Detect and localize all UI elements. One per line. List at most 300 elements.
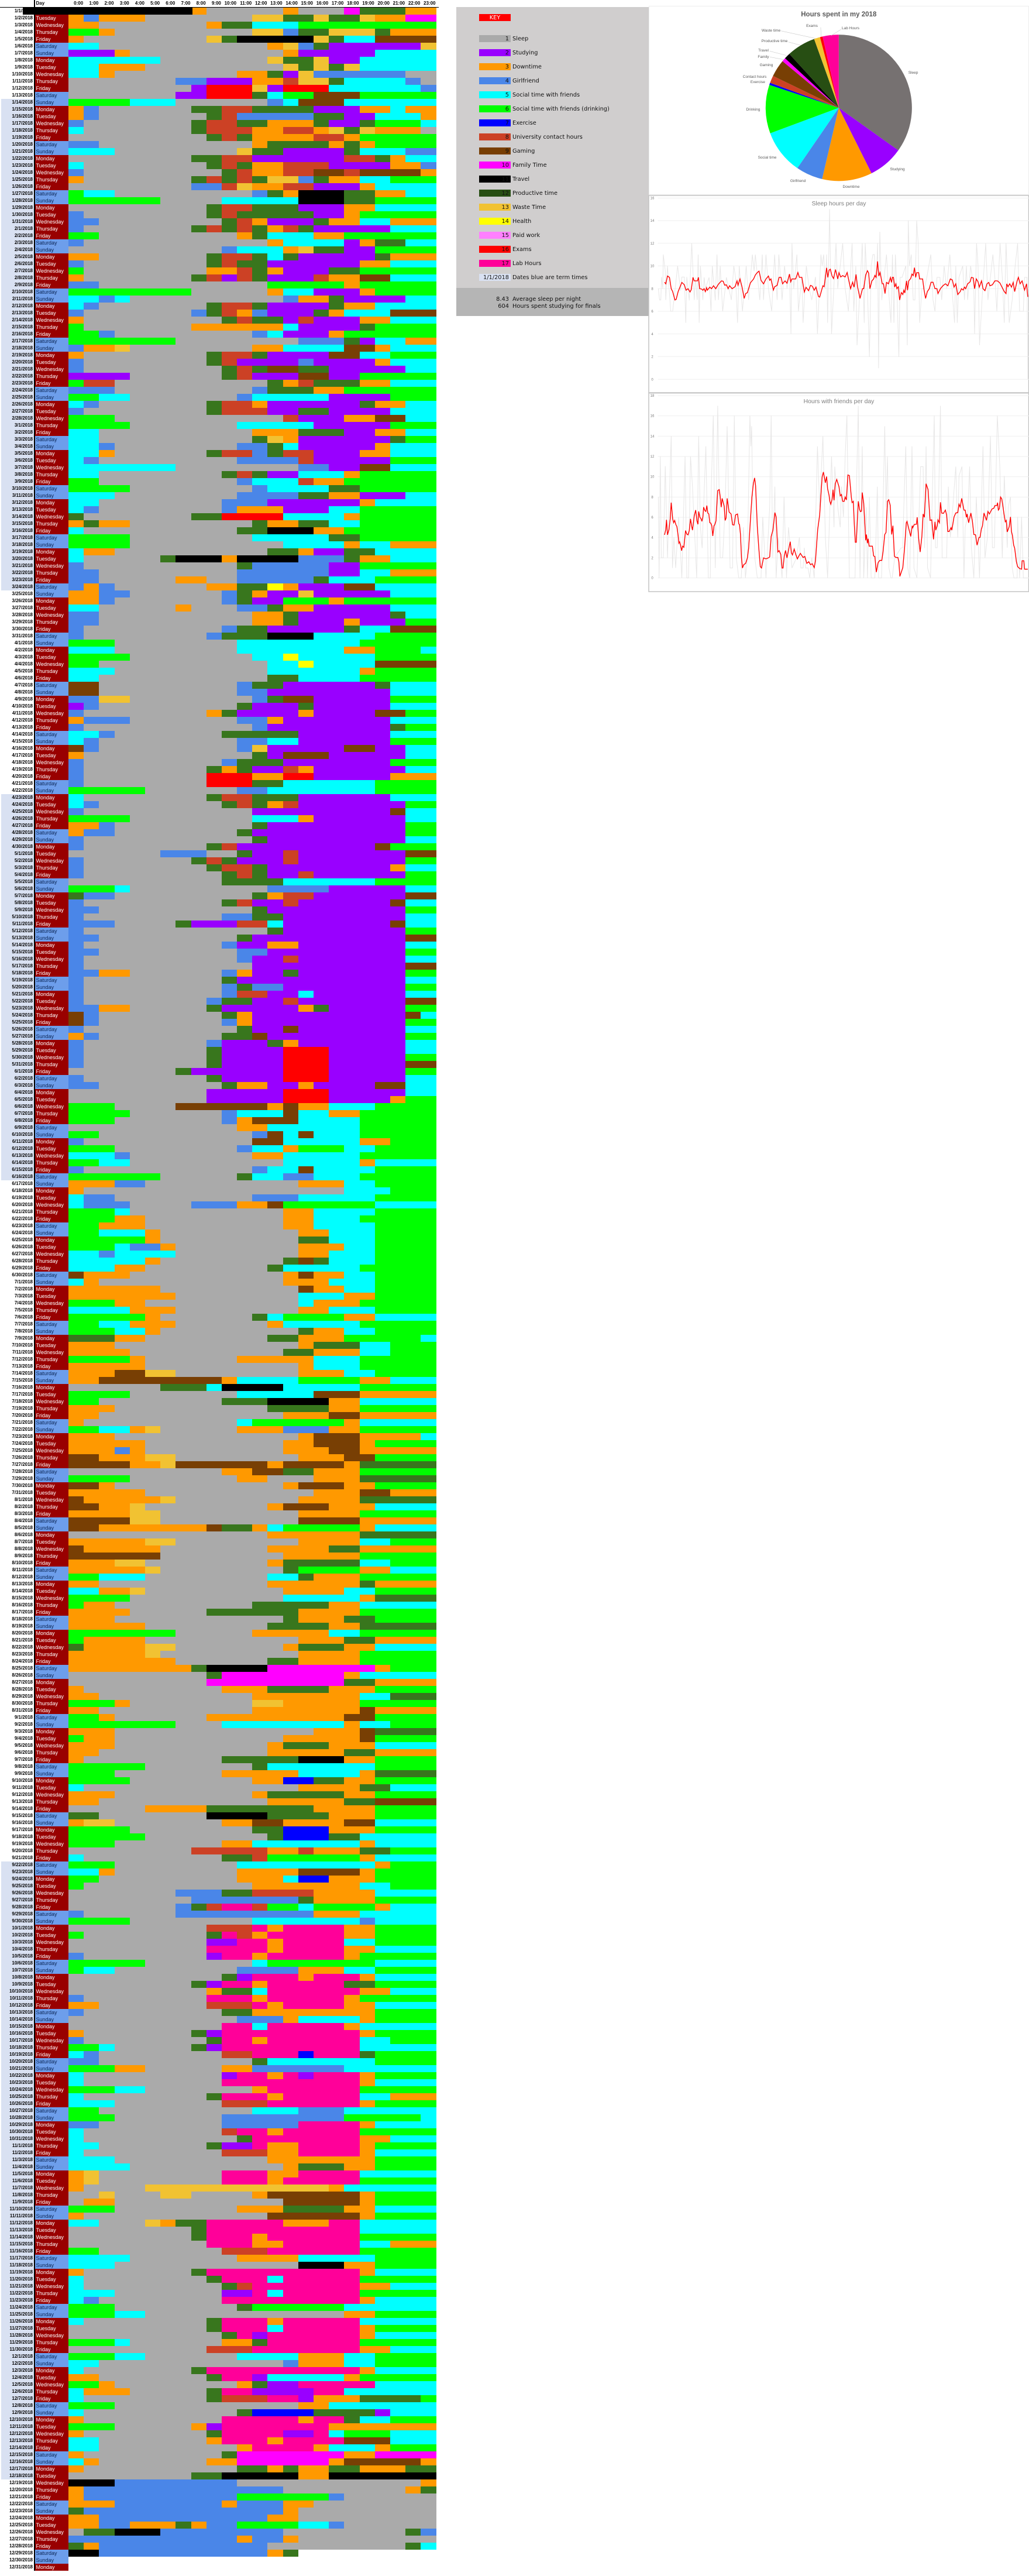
heatmap: hour-by-hour activity for every day of 2018: 9/2/2018 bbox=[15, 1722, 33, 1727]
heatmap: hour-by-hour activity for every day of 2018: Thursday bbox=[36, 1258, 58, 1264]
heatmap: hour-by-hour activity for every day of 2018: 4/18/2018 bbox=[12, 760, 33, 765]
heatmap: hour-by-hour activity for every day of 2018: Friday bbox=[36, 2494, 51, 2500]
heatmap: hour-by-hour activity for every day of 2018: Sunday bbox=[36, 2066, 54, 2072]
heatmap: hour-by-hour activity for every day of 2018: Tuesday bbox=[36, 802, 56, 808]
heatmap: hour-by-hour activity for every day of 2018: Monday bbox=[36, 1581, 55, 1587]
heatmap: hour-by-hour activity for every day of 2018: 7/23/2018 bbox=[12, 1434, 33, 1439]
heatmap: hour-by-hour activity for every day of 2018: 3/30/2018 bbox=[12, 626, 33, 631]
heatmap: hour-by-hour activity for every day of 2018: 4/9/2018 bbox=[15, 696, 33, 702]
heatmap: hour-by-hour activity for every day of 2018: 5/18/2018 bbox=[12, 970, 33, 976]
heatmap: hour-by-hour activity for every day of 2018: Sunday bbox=[36, 1918, 54, 1924]
heatmap: hour-by-hour activity for every day of 2018: Tuesday bbox=[36, 1293, 56, 1299]
heatmap: hour-by-hour activity for every day of 2018: Wednesday bbox=[36, 1055, 64, 1060]
heatmap: hour-by-hour activity for every day of 2018: Monday bbox=[36, 352, 55, 358]
heatmap: hour-by-hour activity for every day of 2018: 12/3/2018 bbox=[12, 2368, 33, 2373]
heatmap: hour-by-hour activity for every day of 2018: 4/5/2018 bbox=[15, 668, 33, 674]
heatmap: hour-by-hour activity for every day of 2018: 7/9/2018 bbox=[15, 1335, 33, 1341]
heatmap: hour-by-hour activity for every day of 2018: Saturday bbox=[36, 1616, 57, 1622]
heatmap: hour-by-hour activity for every day of 2018: 12/17/2018 bbox=[9, 2466, 33, 2471]
heatmap: hour-by-hour activity for every day of 2018: 2/1/2018 bbox=[15, 226, 33, 231]
heatmap: hour-by-hour activity for every day of 2018: Thursday bbox=[36, 2438, 58, 2444]
heatmap: hour-by-hour activity for every day of 2018: 4/30/2018 bbox=[12, 844, 33, 849]
key: studying: Studying bbox=[512, 50, 538, 56]
heatmap: hour-by-hour activity for every day of 2018: 12/30/2018 bbox=[9, 2557, 33, 2563]
heatmap: hour-by-hour activity for every day of 2018: 10/28/2018 bbox=[9, 2115, 33, 2120]
heatmap: hour-by-hour activity for every day of 2018: Tuesday bbox=[36, 2178, 56, 2184]
heatmap: hour-by-hour activity for every day of 2018: 1/26/2018 bbox=[12, 184, 33, 189]
heatmap: hour-by-hour activity for every day of 2018: Saturday bbox=[36, 1420, 57, 1426]
heatmap: hour-by-hour activity for every day of 2018: Wednesday bbox=[36, 2185, 64, 2191]
heatmap: hour-by-hour activity for every day of 2018: Tuesday bbox=[36, 1441, 56, 1447]
heatmap: hour-by-hour activity for every day of 2018: Wednesday bbox=[36, 317, 64, 323]
heatmap: hour-by-hour activity for every day of 2018: Wednesday bbox=[36, 907, 64, 913]
key: health: 14 bbox=[502, 218, 509, 225]
heatmap: hour-by-hour activity for every day of 2018: Sunday bbox=[36, 296, 54, 302]
heatmap header row: Day bbox=[36, 1, 44, 6]
heatmap: hour-by-hour activity for every day of 2018: 1/23/2018 bbox=[12, 163, 33, 168]
key: health: Health bbox=[512, 218, 531, 225]
heatmap: hour-by-hour activity for every day of 2018: 1/30/2018 bbox=[12, 212, 33, 217]
heatmap: hour-by-hour activity for every day of 2018: Friday bbox=[36, 1118, 51, 1124]
key: girlfriend: 4 bbox=[505, 78, 509, 84]
heatmap: hour-by-hour activity for every day of 2018: Sunday bbox=[36, 1033, 54, 1039]
heatmap: hour-by-hour activity for every day of 2018: 8/29/2018 bbox=[12, 1694, 33, 1699]
heatmap: hour-by-hour activity for every day of 2018: 10/23/2018 bbox=[9, 2080, 33, 2085]
pie chart: hours spent in 2018: Exams bbox=[806, 24, 818, 28]
heatmap: hour-by-hour activity for every day of 2018: 9/28/2018 bbox=[12, 1904, 33, 1909]
heatmap: hour-by-hour activity for every day of 2018: Saturday bbox=[36, 1665, 57, 1671]
heatmap: hour-by-hour activity for every day of 2018: Monday bbox=[36, 451, 55, 456]
heatmap: hour-by-hour activity for every day of 2018: Thursday bbox=[36, 2045, 58, 2051]
pie chart: hours spent in 2018: Hours spent in my 2018 bbox=[801, 11, 877, 18]
heatmap: hour-by-hour activity for every day of 2018: 1/28/2018 bbox=[12, 198, 33, 203]
heatmap: hour-by-hour activity for every day of 2018: Wednesday bbox=[36, 366, 64, 372]
heatmap header row: 11:00 bbox=[240, 1, 252, 6]
heatmap: hour-by-hour activity for every day of 2018: 10/15/2018 bbox=[9, 2024, 33, 2029]
key: social time drinking: Social time with friends (drinking) bbox=[512, 106, 610, 112]
heatmap: hour-by-hour activity for every day of 2018: 6/2/2018 bbox=[15, 1076, 33, 1081]
heatmap: hour-by-hour activity for every day of 2018: 4/23/2018 bbox=[12, 795, 33, 800]
heatmap: hour-by-hour activity for every day of 2018: Monday bbox=[36, 746, 55, 751]
heatmap: hour-by-hour activity for every day of 2018: 9/7/2018 bbox=[15, 1757, 33, 1762]
heatmap: hour-by-hour activity for every day of 2018: Tuesday bbox=[36, 2227, 56, 2233]
key: paid work: Paid work bbox=[512, 232, 540, 239]
heatmap: hour-by-hour activity for every day of 2018: Tuesday bbox=[36, 2326, 56, 2331]
heatmap: hour-by-hour activity for every day of 2018: Thursday bbox=[36, 1995, 58, 2001]
heatmap: hour-by-hour activity for every day of 2018: 12/2/2018 bbox=[12, 2361, 33, 2366]
key: downtime: 3 bbox=[505, 64, 509, 70]
line chart: hours with friends per day bbox=[648, 393, 1029, 592]
heatmap: hour-by-hour activity for every day of 2018: Saturday bbox=[36, 43, 57, 49]
heatmap: hour-by-hour activity for every day of 2018: Tuesday bbox=[36, 1981, 56, 1987]
heatmap: hour-by-hour activity for every day of 2018: Saturday bbox=[36, 191, 57, 197]
heatmap: hour-by-hour activity for every day of 2018: 7/28/2018 bbox=[12, 1469, 33, 1474]
heatmap: hour-by-hour activity for every day of 2018: Tuesday bbox=[36, 1588, 56, 1594]
term-time date shading autumn term bbox=[1, 1861, 34, 2479]
key: sleep bbox=[479, 35, 528, 42]
heatmap: hour-by-hour activity for every day of 2018: Monday bbox=[36, 1876, 55, 1882]
heatmap: hour-by-hour activity for every day of 2018: 11/29/2018 bbox=[9, 2340, 33, 2345]
heatmap: hour-by-hour activity for every day of 2018: 1/24/2018 bbox=[12, 170, 33, 175]
heatmap header row: 18:00 bbox=[347, 1, 359, 6]
heatmap: hour-by-hour activity for every day of 2018: Sunday bbox=[36, 50, 54, 56]
heatmap: hour-by-hour activity for every day of 2018: Friday bbox=[36, 1904, 51, 1910]
heatmap: hour-by-hour activity for every day of 2018: Sunday bbox=[36, 1869, 54, 1875]
heatmap: hour-by-hour activity for every day of 2018: Wednesday bbox=[36, 710, 64, 716]
heatmap: hour-by-hour activity for every day of 2018: 3/14/2018 bbox=[12, 514, 33, 519]
heatmap: hour-by-hour activity for every day of 2018: 3/10/2018 bbox=[12, 486, 33, 491]
heatmap: hour-by-hour activity for every day of 2018: 9/15/2018 bbox=[12, 1813, 33, 1818]
line chart: sleep hours per day: 0 bbox=[651, 378, 653, 382]
heatmap: hour-by-hour activity for every day of 2018: 8/21/2018 bbox=[12, 1637, 33, 1643]
heatmap: hour-by-hour activity for every day of 2018: 1/1/2018 bbox=[15, 8, 33, 13]
heatmap: hour-by-hour activity for every day of 2018: Friday bbox=[36, 2003, 51, 2008]
heatmap: hour-by-hour activity for every day of 2018: Friday bbox=[36, 528, 51, 534]
heatmap: hour-by-hour activity for every day of 2018: 7/26/2018 bbox=[12, 1455, 33, 1460]
heatmap: hour-by-hour activity for every day of 2018: Sunday bbox=[36, 2115, 54, 2121]
heatmap: hour-by-hour activity for every day of 2018: 1/19/2018 bbox=[12, 135, 33, 140]
heatmap: hour-by-hour activity for every day of 2018: Monday bbox=[36, 205, 55, 211]
heatmap header row: 2:00 bbox=[105, 1, 114, 6]
heatmap: hour-by-hour activity for every day of 2018: Friday bbox=[36, 1314, 51, 1320]
heatmap: hour-by-hour activity for every day of 2018: 3/7/2018 bbox=[15, 465, 33, 470]
heatmap: hour-by-hour activity for every day of 2018: Wednesday bbox=[36, 2382, 64, 2388]
heatmap: hour-by-hour activity for every day of 2018: Tuesday bbox=[36, 1490, 56, 1496]
heatmap: hour-by-hour activity for every day of 2018: Sunday bbox=[36, 345, 54, 351]
heatmap: hour-by-hour activity for every day of 2018: 4/21/2018 bbox=[12, 781, 33, 786]
heatmap: hour-by-hour activity for every day of 2018: 2/11/2018 bbox=[12, 296, 33, 301]
heatmap: hour-by-hour activity for every day of 2018: 5/27/2018 bbox=[12, 1033, 33, 1039]
heatmap: hour-by-hour activity for every day of 2018: Saturday bbox=[36, 830, 57, 836]
heatmap: hour-by-hour activity for every day of 2018: 6/10/2018 bbox=[12, 1132, 33, 1137]
heatmap: hour-by-hour activity for every day of 2018: Wednesday bbox=[36, 2480, 64, 2486]
heatmap: hour-by-hour activity for every day of 2018: Wednesday bbox=[36, 1988, 64, 1994]
heatmap: hour-by-hour activity for every day of 2018: 10/4/2018 bbox=[12, 1946, 33, 1952]
heatmap: hour-by-hour activity for every day of 2018: Thursday bbox=[36, 1553, 58, 1559]
heatmap: hour-by-hour activity for every day of 2018: 1/14/2018 bbox=[12, 99, 33, 105]
key: exercise: 7 bbox=[505, 120, 509, 126]
heatmap: hour-by-hour activity for every day of 2018: 7/12/2018 bbox=[12, 1356, 33, 1362]
pie chart: hours spent in 2018: Productive time bbox=[762, 39, 788, 43]
heatmap: hour-by-hour activity for every day of 2018: 12/23/2018 bbox=[9, 2508, 33, 2513]
heatmap: hour-by-hour activity for every day of 2018: 4/24/2018 bbox=[12, 802, 33, 807]
heatmap: hour-by-hour activity for every day of 2018: 2/8/2018 bbox=[15, 275, 33, 280]
heatmap: hour-by-hour activity for every day of 2018: 7/1/2018 bbox=[15, 1279, 33, 1284]
heatmap header row: 17:00 bbox=[332, 1, 343, 6]
heatmap: hour-by-hour activity for every day of 2018: Sunday bbox=[36, 2311, 54, 2317]
heatmap: hour-by-hour activity for every day of 2018: Tuesday bbox=[36, 998, 56, 1004]
heatmap: hour-by-hour activity for every day of 2018: 7/6/2018 bbox=[15, 1314, 33, 1320]
pie chart: hours spent in 2018: Studying bbox=[890, 167, 905, 171]
heatmap: hour-by-hour activity for every day of 2018: 1/31/2018 bbox=[12, 219, 33, 224]
heatmap: hour-by-hour activity for every day of 2018: 10/16/2018 bbox=[9, 2031, 33, 2036]
heatmap: hour-by-hour activity for every day of 2018: Saturday bbox=[36, 781, 57, 786]
key: paid work: 15 bbox=[502, 232, 509, 239]
heatmap: hour-by-hour activity for every day of 2018: 7/5/2018 bbox=[15, 1307, 33, 1313]
heatmap: hour-by-hour activity for every day of 2018: 3/23/2018 bbox=[12, 577, 33, 582]
heatmap: hour-by-hour activity for every day of 2018: Sunday bbox=[36, 837, 54, 843]
heatmap: hour-by-hour activity for every day of 2018: Wednesday bbox=[36, 71, 64, 77]
heatmap: hour-by-hour activity for every day of 2018: Wednesday bbox=[36, 2087, 64, 2093]
heatmap: hour-by-hour activity for every day of 2018: 8/25/2018 bbox=[12, 1665, 33, 1671]
heatmap: hour-by-hour activity for every day of 2018: 8/4/2018 bbox=[15, 1518, 33, 1523]
heatmap: hour-by-hour activity for every day of 2018: 7/27/2018 bbox=[12, 1462, 33, 1467]
heatmap: hour-by-hour activity for every day of 2018: Saturday bbox=[36, 1223, 57, 1229]
heatmap: hour-by-hour activity for every day of 2018: 11/21/2018 bbox=[9, 2283, 33, 2289]
line chart: hours with friends per day: 10 bbox=[651, 476, 655, 479]
heatmap: hour-by-hour activity for every day of 2018: 6/27/2018 bbox=[12, 1251, 33, 1256]
heatmap: hour-by-hour activity for every day of 2018: 9/24/2018 bbox=[12, 1876, 33, 1881]
heatmap: hour-by-hour activity for every day of 2018: 5/26/2018 bbox=[12, 1026, 33, 1032]
heatmap: hour-by-hour activity for every day of 2018: 12/1/2018 bbox=[12, 2354, 33, 2359]
heatmap: hour-by-hour activity for every day of 2018: 3/1/2018 bbox=[15, 423, 33, 428]
term-time date shading bbox=[1, 99, 34, 590]
heatmap: hour-by-hour activity for every day of 2018: 6/19/2018 bbox=[12, 1195, 33, 1200]
key: paid work bbox=[479, 232, 540, 239]
heatmap: hour-by-hour activity for every day of 2018: 1/20/2018 bbox=[12, 142, 33, 147]
line chart: sleep hours per day: 12 bbox=[651, 242, 655, 246]
heatmap: hour-by-hour activity for every day of 2018: Thursday bbox=[36, 668, 58, 674]
heatmap: hour-by-hour activity for every day of 2018: Thursday bbox=[36, 2536, 58, 2542]
heatmap: hour-by-hour activity for every day of 2018: 9/27/2018 bbox=[12, 1897, 33, 1902]
heatmap: hour-by-hour activity for every day of 2018: Sunday bbox=[36, 2017, 54, 2022]
heatmap: hour-by-hour activity for every day of 2018: 6/25/2018 bbox=[12, 1237, 33, 1242]
heatmap: hour-by-hour activity for every day of 2018: Thursday bbox=[36, 1062, 58, 1067]
line chart: hours with friends per day: 8 bbox=[651, 496, 653, 499]
heatmap: hour-by-hour activity for every day of 2018: Friday bbox=[36, 2297, 51, 2303]
heatmap: hour-by-hour activity for every day of 2018: 1/17/2018 bbox=[12, 121, 33, 126]
heatmap: hour-by-hour activity for every day of 2018: 6/17/2018 bbox=[12, 1181, 33, 1186]
heatmap: hour-by-hour activity for every day of 2018: 11/9/2018 bbox=[12, 2199, 33, 2204]
heatmap: hour-by-hour activity for every day of 2018: Monday bbox=[36, 2220, 55, 2226]
heatmap: hour-by-hour activity for every day of 2018: Monday bbox=[36, 647, 55, 653]
heatmap: hour-by-hour activity for every day of 2018: Wednesday bbox=[36, 1743, 64, 1749]
heatmap: hour-by-hour activity for every day of 2018: Monday bbox=[36, 1532, 55, 1538]
pie chart: hours spent in 2018: Girlfriend bbox=[790, 179, 806, 183]
heatmap: hour-by-hour activity for every day of 2018: 10/3/2018 bbox=[12, 1939, 33, 1945]
heatmap: hour-by-hour activity for every day of 2018: Saturday bbox=[36, 2010, 57, 2015]
key: gaming: 9 bbox=[505, 148, 509, 154]
heatmap: hour-by-hour activity for every day of 2018: 5/25/2018 bbox=[12, 1019, 33, 1025]
heatmap: hour-by-hour activity for every day of 2018: Wednesday bbox=[36, 2234, 64, 2240]
heatmap: hour-by-hour activity for every day of 2018: 1/29/2018 bbox=[12, 205, 33, 210]
key: girlfriend: Girlfriend bbox=[512, 78, 539, 84]
pie chart: hours spent in 2018: Downtime bbox=[843, 185, 860, 189]
heatmap: hour-by-hour activity for every day of 2018: Friday bbox=[36, 1019, 51, 1025]
heatmap: hour-by-hour activity for every day of 2018: Friday bbox=[36, 282, 51, 288]
key: exercise: Exercise bbox=[512, 120, 536, 126]
heatmap: hour-by-hour activity for every day of 2018: 2/27/2018 bbox=[12, 408, 33, 414]
heatmap: hour-by-hour activity for every day of 2018: 8/15/2018 bbox=[12, 1595, 33, 1600]
heatmap: hour-by-hour activity for every day of 2018: Thursday bbox=[36, 226, 58, 232]
heatmap: hour-by-hour activity for every day of 2018: Saturday bbox=[36, 486, 57, 492]
heatmap: hour-by-hour activity for every day of 2018: Sunday bbox=[36, 493, 54, 499]
heatmap: hour-by-hour activity for every day of 2018: 12/21/2018 bbox=[9, 2494, 33, 2499]
key: exams: Exams bbox=[512, 246, 532, 253]
pie chart: hours spent in 2018: Sleep bbox=[908, 71, 918, 75]
heatmap: hour-by-hour activity for every day of 2018: Saturday bbox=[36, 387, 57, 393]
heatmap: hour-by-hour activity for every day of 2018: Tuesday bbox=[36, 408, 56, 414]
heatmap: hour-by-hour activity for every day of 2018: 5/29/2018 bbox=[12, 1047, 33, 1053]
heatmap: hour-by-hour activity for every day of 2018: 9/8/2018 bbox=[15, 1764, 33, 1769]
heatmap: hour-by-hour activity for every day of 2018: Sunday bbox=[36, 1672, 54, 1678]
heatmap: hour-by-hour activity for every day of 2018: 12/22/2018 bbox=[9, 2501, 33, 2506]
heatmap: hour-by-hour activity for every day of 2018: Monday bbox=[36, 8, 55, 14]
heatmap: hour-by-hour activity for every day of 2018: Tuesday bbox=[36, 310, 56, 316]
heatmap: hour-by-hour activity for every day of 2018: 2/22/2018 bbox=[12, 373, 33, 379]
key heading: KEY bbox=[490, 15, 500, 21]
heatmap: hour-by-hour activity for every day of 2018: Tuesday bbox=[36, 2473, 56, 2479]
line chart: hours with friends per day: 0 bbox=[651, 577, 653, 581]
heatmap: hour-by-hour activity for every day of 2018: Wednesday bbox=[36, 268, 64, 274]
heatmap: hour-by-hour activity for every day of 2018: Saturday bbox=[36, 289, 57, 295]
heatmap: hour-by-hour activity for every day of 2018: Tuesday bbox=[36, 2375, 56, 2381]
heatmap: hour-by-hour activity for every day of 2018: 3/31/2018 bbox=[12, 633, 33, 638]
key: term-time date note bbox=[479, 274, 588, 281]
heatmap: hour-by-hour activity for every day of 2018: 7/31/2018 bbox=[12, 1490, 33, 1495]
heatmap: hour-by-hour activity for every day of 2018: 6/3/2018 bbox=[15, 1083, 33, 1088]
heatmap: hour-by-hour activity for every day of 2018: 8/31/2018 bbox=[12, 1708, 33, 1713]
heatmap: hour-by-hour activity for every day of 2018: 8/28/2018 bbox=[12, 1687, 33, 1692]
heatmap: hour-by-hour activity for every day of 2018: 9/12/2018 bbox=[12, 1792, 33, 1797]
heatmap: hour-by-hour activity for every day of 2018: 10/9/2018 bbox=[12, 1981, 33, 1987]
heatmap: hour-by-hour activity for every day of 2018: Thursday bbox=[36, 275, 58, 281]
heatmap: hour-by-hour activity for every day of 2018: 12/27/2018 bbox=[9, 2536, 33, 2541]
heatmap: hour-by-hour activity for every day of 2018: 9/23/2018 bbox=[12, 1869, 33, 1874]
heatmap: hour-by-hour activity for every day of 2018: Thursday bbox=[36, 1897, 58, 1903]
heatmap: hour-by-hour activity for every day of 2018: Sunday bbox=[36, 2557, 54, 2563]
heatmap: hour-by-hour activity for every day of 2018: 10/8/2018 bbox=[12, 1974, 33, 1980]
heatmap: hour-by-hour activity for every day of 2018: Monday bbox=[36, 303, 55, 309]
heatmap: hour-by-hour activity for every day of 2018: 12/31/2018 bbox=[9, 2564, 33, 2570]
heatmap: hour-by-hour activity for every day of 2018: 7/15/2018 bbox=[12, 1378, 33, 1383]
line chart: sleep hours per day: 8 bbox=[651, 288, 653, 291]
heatmap: hour-by-hour activity for every day of 2018: Tuesday bbox=[36, 1539, 56, 1545]
heatmap header row: 4:00 bbox=[135, 1, 144, 6]
key: travel bbox=[479, 176, 529, 183]
heatmap: hour-by-hour activity for every day of 2018: Friday bbox=[36, 970, 51, 976]
heatmap: hour-by-hour activity for every day of 2018: Friday bbox=[36, 1855, 51, 1861]
heatmap: hour-by-hour activity for every day of 2018: 7/10/2018 bbox=[12, 1342, 33, 1348]
heatmap: hour-by-hour activity for every day of 2018: 8/26/2018 bbox=[12, 1672, 33, 1678]
heatmap: hour-by-hour activity for every day of 2018: Thursday bbox=[36, 1356, 58, 1362]
heatmap: hour-by-hour activity for every day of 2018: Sunday bbox=[36, 444, 54, 449]
line chart: sleep hours per day: 10 bbox=[651, 265, 655, 268]
heatmap: hour-by-hour activity for every day of 2018: 10/13/2018 bbox=[9, 2010, 33, 2015]
heatmap: hour-by-hour activity for every day of 2018: 9/18/2018 bbox=[12, 1834, 33, 1839]
heatmap: hour-by-hour activity for every day of 2018: 9/30/2018 bbox=[12, 1918, 33, 1924]
heatmap: hour-by-hour activity for every day of 2018: Friday bbox=[36, 233, 51, 239]
heatmap: hour-by-hour activity for every day of 2018: 11/23/2018 bbox=[9, 2297, 33, 2303]
heatmap: hour-by-hour activity for every day of 2018: 9/25/2018 bbox=[12, 1883, 33, 1888]
heatmap: hour-by-hour activity for every day of 2018: Sunday bbox=[36, 99, 54, 105]
heatmap: hour-by-hour activity for every day of 2018: 5/22/2018 bbox=[12, 998, 33, 1004]
heatmap: hour-by-hour activity for every day of 2018: 7/14/2018 bbox=[12, 1371, 33, 1376]
heatmap: hour-by-hour activity for every day of 2018: Saturday bbox=[36, 2206, 57, 2212]
heatmap: hour-by-hour activity for every day of 2018: Monday bbox=[36, 1139, 55, 1145]
heatmap: hour-by-hour activity for every day of 2018: Sunday bbox=[36, 591, 54, 597]
heatmap: hour-by-hour activity for every day of 2018: Monday bbox=[36, 942, 55, 948]
heatmap: hour-by-hour activity for every day of 2018: Wednesday bbox=[36, 956, 64, 962]
key: university contact hours: University contact hours bbox=[512, 134, 583, 140]
heatmap: hour-by-hour activity for every day of 2018: Friday bbox=[36, 1363, 51, 1369]
heatmap: hour-by-hour activity for every day of 2018: Thursday bbox=[36, 816, 58, 822]
heatmap: hour-by-hour activity for every day of 2018: 4/7/2018 bbox=[15, 682, 33, 688]
heatmap: hour-by-hour activity for every day of 2018: 11/6/2018 bbox=[12, 2178, 33, 2183]
heatmap: hour-by-hour activity for every day of 2018: 3/28/2018 bbox=[12, 612, 33, 617]
heatmap: hour-by-hour activity for every day of 2018: 2/18/2018 bbox=[12, 345, 33, 351]
heatmap: hour-by-hour activity for every day of 2018: Monday bbox=[36, 1090, 55, 1095]
heatmap: hour-by-hour activity for every day of 2018: 2/2/2018 bbox=[15, 233, 33, 238]
heatmap: hour-by-hour activity for every day of 2018: Sunday bbox=[36, 1132, 54, 1138]
heatmap: hour-by-hour activity for every day of 2018: 5/8/2018 bbox=[15, 900, 33, 905]
heatmap: hour-by-hour activity for every day of 2018: Friday bbox=[36, 2543, 51, 2549]
heatmap: hour-by-hour activity for every day of 2018: Tuesday bbox=[36, 1195, 56, 1201]
heatmap: hour-by-hour activity for every day of 2018: Thursday bbox=[36, 2094, 58, 2100]
heatmap: hour-by-hour activity for every day of 2018: Sunday bbox=[36, 1181, 54, 1187]
heatmap: hour-by-hour activity for every day of 2018: 3/19/2018 bbox=[12, 549, 33, 554]
heatmap: hour-by-hour activity for every day of 2018: 4/15/2018 bbox=[12, 739, 33, 744]
heatmap: hour-by-hour activity for every day of 2018: Sunday bbox=[36, 1771, 54, 1777]
heatmap: hour-by-hour activity for every day of 2018: 1/27/2018 bbox=[12, 191, 33, 196]
heatmap: hour-by-hour activity for every day of 2018: Tuesday bbox=[36, 212, 56, 218]
heatmap: hour-by-hour activity for every day of 2018: Sunday bbox=[36, 1574, 54, 1580]
heatmap: hour-by-hour activity for every day of 2018: 7/3/2018 bbox=[15, 1293, 33, 1299]
heatmap: hour-by-hour activity for every day of 2018: Friday bbox=[36, 1216, 51, 1222]
heatmap: hour-by-hour activity for every day of 2018: 11/8/2018 bbox=[12, 2192, 33, 2197]
heatmap: hour-by-hour activity for every day of 2018: Monday bbox=[36, 1827, 55, 1833]
heatmap: hour-by-hour activity for every day of 2018: 2/3/2018 bbox=[15, 240, 33, 245]
heatmap: hour-by-hour activity for every day of 2018: 11/14/2018 bbox=[9, 2234, 33, 2240]
heatmap: hour-by-hour activity for every day of 2018: Saturday bbox=[36, 1076, 57, 1081]
heatmap: hour-by-hour activity for every day of 2018: 9/21/2018 bbox=[12, 1855, 33, 1860]
heatmap: hour-by-hour activity for every day of 2018: 4/29/2018 bbox=[12, 837, 33, 842]
heatmap: hour-by-hour activity for every day of 2018: Tuesday bbox=[36, 753, 56, 758]
heatmap: hour-by-hour activity for every day of 2018: Saturday bbox=[36, 1272, 57, 1278]
heatmap: hour-by-hour activity for every day of 2018: Wednesday bbox=[36, 858, 64, 864]
heatmap: hour-by-hour activity for every day of 2018: 1/12/2018 bbox=[12, 85, 33, 91]
heatmap: hour-by-hour activity for every day of 2018: 5/14/2018 bbox=[12, 942, 33, 947]
heatmap: hour-by-hour activity for every day of 2018: Monday bbox=[36, 2368, 55, 2374]
heatmap: hour-by-hour activity for every day of 2018: Tuesday bbox=[36, 605, 56, 611]
heatmap: hour-by-hour activity for every day of 2018: Monday bbox=[36, 2515, 55, 2521]
heatmap: hour-by-hour activity for every day of 2018: 7/16/2018 bbox=[12, 1385, 33, 1390]
heatmap: hour-by-hour activity for every day of 2018: Sunday bbox=[36, 1328, 54, 1334]
key: family time: Family Time bbox=[512, 162, 547, 169]
heatmap: hour-by-hour activity for every day of 2018: Wednesday bbox=[36, 170, 64, 176]
heatmap: hour-by-hour activity for every day of 2018: 11/2/2018 bbox=[12, 2150, 33, 2155]
heatmap: hour-by-hour activity for every day of 2018: Sunday bbox=[36, 2213, 54, 2219]
heatmap: hour-by-hour activity for every day of 2018: Tuesday bbox=[36, 2276, 56, 2282]
heatmap: hour-by-hour activity for every day of 2018: 8/27/2018 bbox=[12, 1679, 33, 1685]
heatmap: hour-by-hour activity for every day of 2018: Sunday bbox=[36, 247, 54, 253]
heatmap: hour-by-hour activity for every day of 2018: 8/10/2018 bbox=[12, 1560, 33, 1565]
heatmap: hour-by-hour activity for every day of 2018: Friday bbox=[36, 1708, 51, 1713]
heatmap: hour-by-hour activity for every day of 2018: Wednesday bbox=[36, 1595, 64, 1601]
heatmap: hour-by-hour activity for every day of 2018: 4/19/2018 bbox=[12, 767, 33, 772]
heatmap: hour-by-hour activity for every day of 2018: 9/5/2018 bbox=[15, 1743, 33, 1748]
heatmap: hour-by-hour activity for every day of 2018: 12/6/2018 bbox=[12, 2389, 33, 2394]
heatmap: hour-by-hour activity for every day of 2018: 12/26/2018 bbox=[9, 2529, 33, 2534]
heatmap: hour-by-hour activity for every day of 2018: 6/23/2018 bbox=[12, 1223, 33, 1228]
heatmap: hour-by-hour activity for every day of 2018: 7/7/2018 bbox=[15, 1321, 33, 1327]
heatmap: hour-by-hour activity for every day of 2018: Monday bbox=[36, 991, 55, 997]
heatmap header row: 0:00 bbox=[74, 1, 83, 6]
heatmap: hour-by-hour activity for every day of 2018: Wednesday bbox=[36, 22, 64, 28]
heatmap: hour-by-hour activity for every day of 2018: 8/17/2018 bbox=[12, 1609, 33, 1615]
heatmap: hour-by-hour activity for every day of 2018: Thursday bbox=[36, 373, 58, 379]
heatmap: hour-by-hour activity for every day of 2018: Friday bbox=[36, 2445, 51, 2451]
